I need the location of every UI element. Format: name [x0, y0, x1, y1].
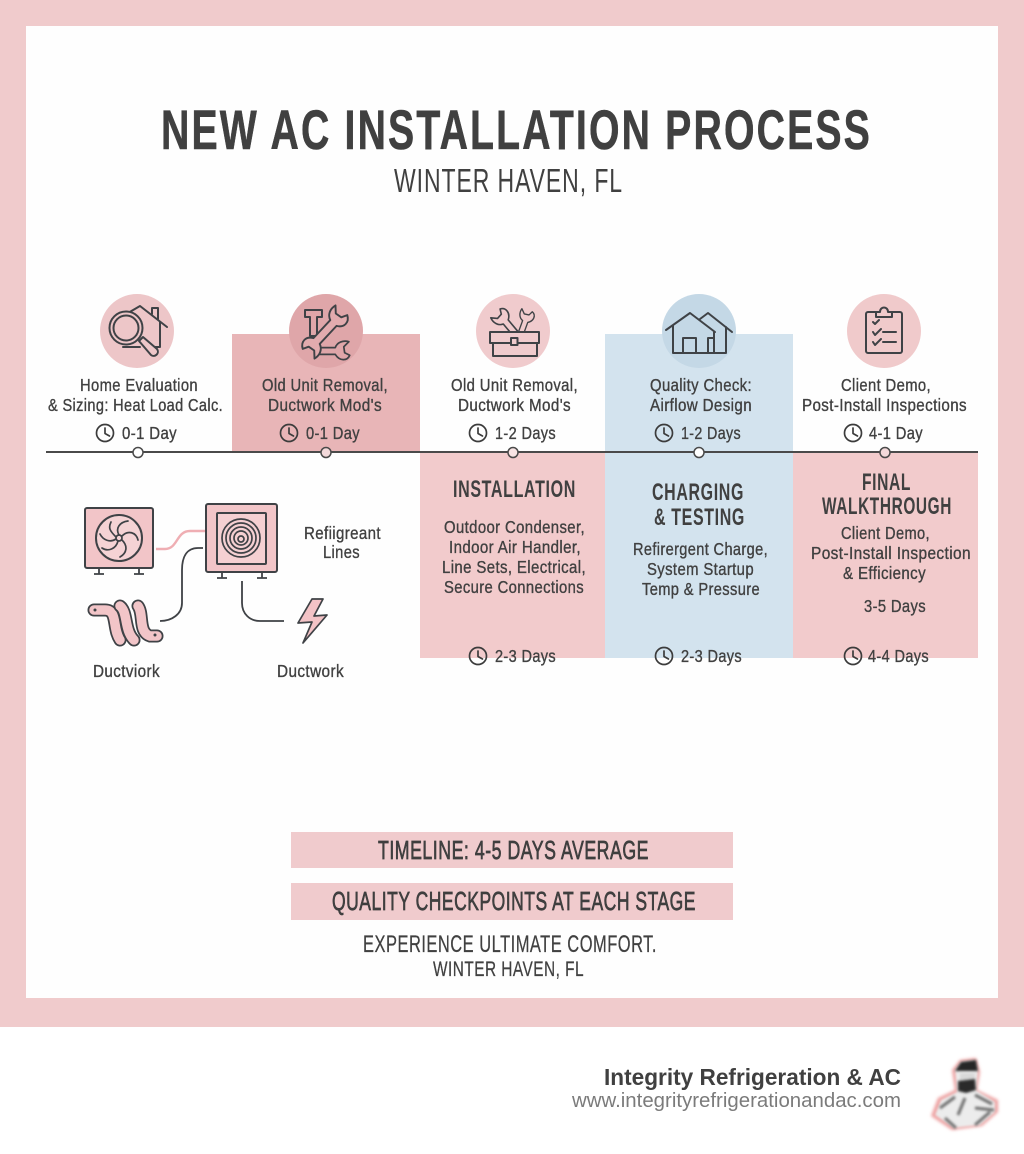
final walkthrough text block: WALKTHROUGH [822, 493, 952, 520]
step 2 label: 0-1 Day [306, 423, 360, 443]
installation text block: Outdoor Condenser, [444, 517, 585, 537]
installation text block: 2-3 Days [495, 646, 556, 666]
footer company name and website: www.integrityrefrigerationandac.com [571, 1090, 901, 1112]
step 2 label: Ductwork Mod's [268, 395, 382, 415]
icon: electrical bolt [298, 599, 327, 643]
icon: outdoor condenser [85, 508, 153, 574]
step 3 label: Old Unit Removal, [451, 375, 578, 395]
installation text block: Indoor Air Handler, [449, 537, 581, 557]
step 5 label: 4-1 Day [869, 423, 923, 443]
installation text block [442, 476, 586, 666]
charging and testing text block: Temp & Pressure [642, 579, 760, 599]
icon: toolbox [476, 294, 550, 368]
step 3 label: Ductwork Mod's [458, 395, 571, 415]
callout: quality checkpoints: QUALITY CHECKPOINTS AT EACH STAGE [332, 886, 696, 916]
step 4 label: Airflow Design [650, 395, 752, 415]
icon: indoor air handler [206, 504, 277, 578]
final walkthrough text block [811, 469, 971, 666]
timeline axis [46, 448, 978, 458]
charging and testing text block: System Startup [647, 559, 754, 579]
installation text block: INSTALLATION [453, 476, 576, 503]
panel: old unit removal highlight [232, 334, 420, 452]
charging and testing text block: CHARGING [652, 479, 744, 506]
final walkthrough text block: Client Demo, [841, 523, 930, 543]
refrigerant line [156, 531, 205, 549]
closing message: WINTER HAVEN, FL [433, 958, 584, 981]
label: ductwork left: Ductviork [93, 661, 160, 681]
step 1 label [48, 375, 223, 443]
footer company name and website [571, 1064, 901, 1112]
installation text block: Line Sets, Electrical, [442, 557, 586, 577]
icon: home evaluation magnifier [100, 294, 174, 368]
step 1 label: Home Evaluation [80, 375, 198, 395]
duct connector lines [160, 548, 284, 621]
closing message [363, 931, 657, 981]
icon: clipboard checklist [847, 294, 921, 368]
step 1 label: & Sizing: Heat Load Calc. [48, 395, 223, 415]
white content panel [26, 26, 998, 998]
label: refrigerant lines: Refiigreant [304, 523, 381, 543]
step 2 label: Old Unit Removal, [262, 375, 388, 395]
charging and testing text block: Refirergent Charge, [633, 539, 768, 559]
final walkthrough text block: 4-4 Days [868, 646, 929, 666]
step 2 label [262, 375, 388, 443]
callout: quality checkpoints [291, 883, 733, 920]
step 4 label: Quality Check: [650, 375, 752, 395]
panel: quality check and charging column [605, 334, 793, 658]
step 5 label: Post-Install Inspections [802, 395, 967, 415]
callout: timeline average [291, 832, 733, 868]
step 3 label [451, 375, 578, 443]
step 5 label: Client Demo, [841, 375, 931, 395]
installation text block: Secure Connections [444, 577, 584, 597]
panel: installation [420, 452, 605, 658]
label: ductwork right: Ductwork [277, 661, 344, 681]
system diagram [85, 504, 381, 681]
step 3 label: 1-2 Days [495, 423, 556, 443]
closing message: EXPERIENCE ULTIMATE COMFORT. [363, 931, 657, 958]
charging and testing text block [633, 479, 768, 666]
step 1 label: 0-1 Day [122, 423, 177, 443]
final walkthrough text block: & Efficiency [843, 563, 926, 583]
final walkthrough text block: Post-Install Inspection [811, 543, 971, 563]
callout: timeline average: TIMELINE: 4-5 DAYS AVERAGE [378, 835, 649, 865]
panel: final walkthrough [793, 452, 978, 658]
step 4 label: 1-2 Days [681, 423, 741, 443]
icon: tools hammer and wrenches [289, 294, 363, 368]
step 4 label [650, 375, 752, 443]
final walkthrough text block: 3-5 Days [864, 596, 926, 616]
icon: houses airflow [662, 294, 736, 368]
icon: ductwork coil [94, 606, 157, 640]
icon: technician mascot [931, 1058, 998, 1130]
final walkthrough text block: FINAL [862, 469, 911, 496]
label: refrigerant lines: Lines [323, 542, 360, 562]
footer company name and website: Integrity Refrigeration & AC [604, 1064, 901, 1090]
subtitle: WINTER HAVEN, FL [394, 162, 623, 199]
label: refrigerant lines [304, 523, 381, 562]
charging and testing text block: & TESTING [654, 504, 745, 531]
charging and testing text block: 2-3 Days [681, 646, 742, 666]
step 5 label [802, 375, 967, 443]
